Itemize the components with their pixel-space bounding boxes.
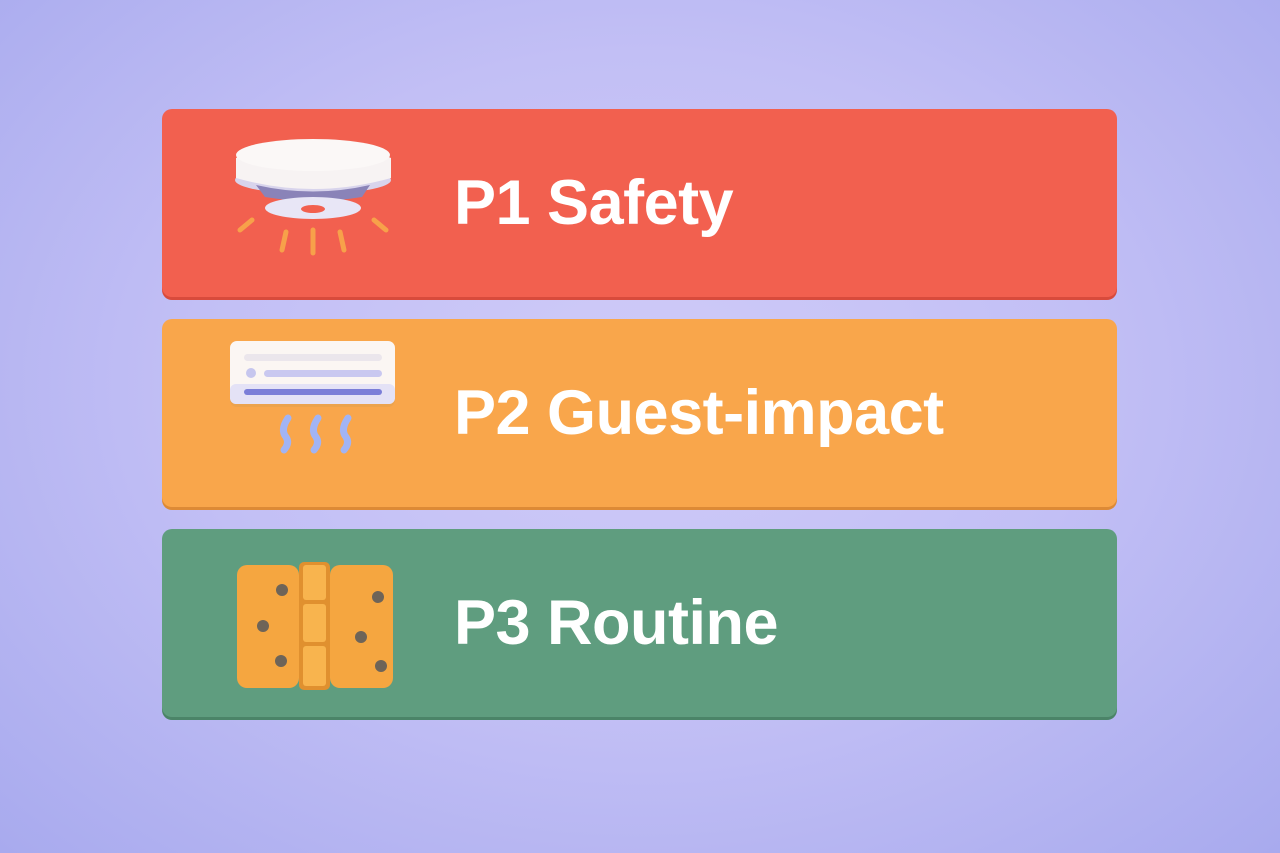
panel: P2 Guest-impact [162,319,1117,507]
icon: smoke detector [235,139,391,256]
heading: P1 Safety: P1 Safety [454,168,733,238]
icon: hinge [237,562,393,690]
heading: P3 Routine: P3 Routine [454,588,778,658]
panel: P1 Safety [162,109,1117,297]
heading: P2 Guest-impact: P2 Guest-impact [454,378,944,448]
panel: P3 Routine [162,529,1117,717]
icon: air conditioner [230,341,395,454]
